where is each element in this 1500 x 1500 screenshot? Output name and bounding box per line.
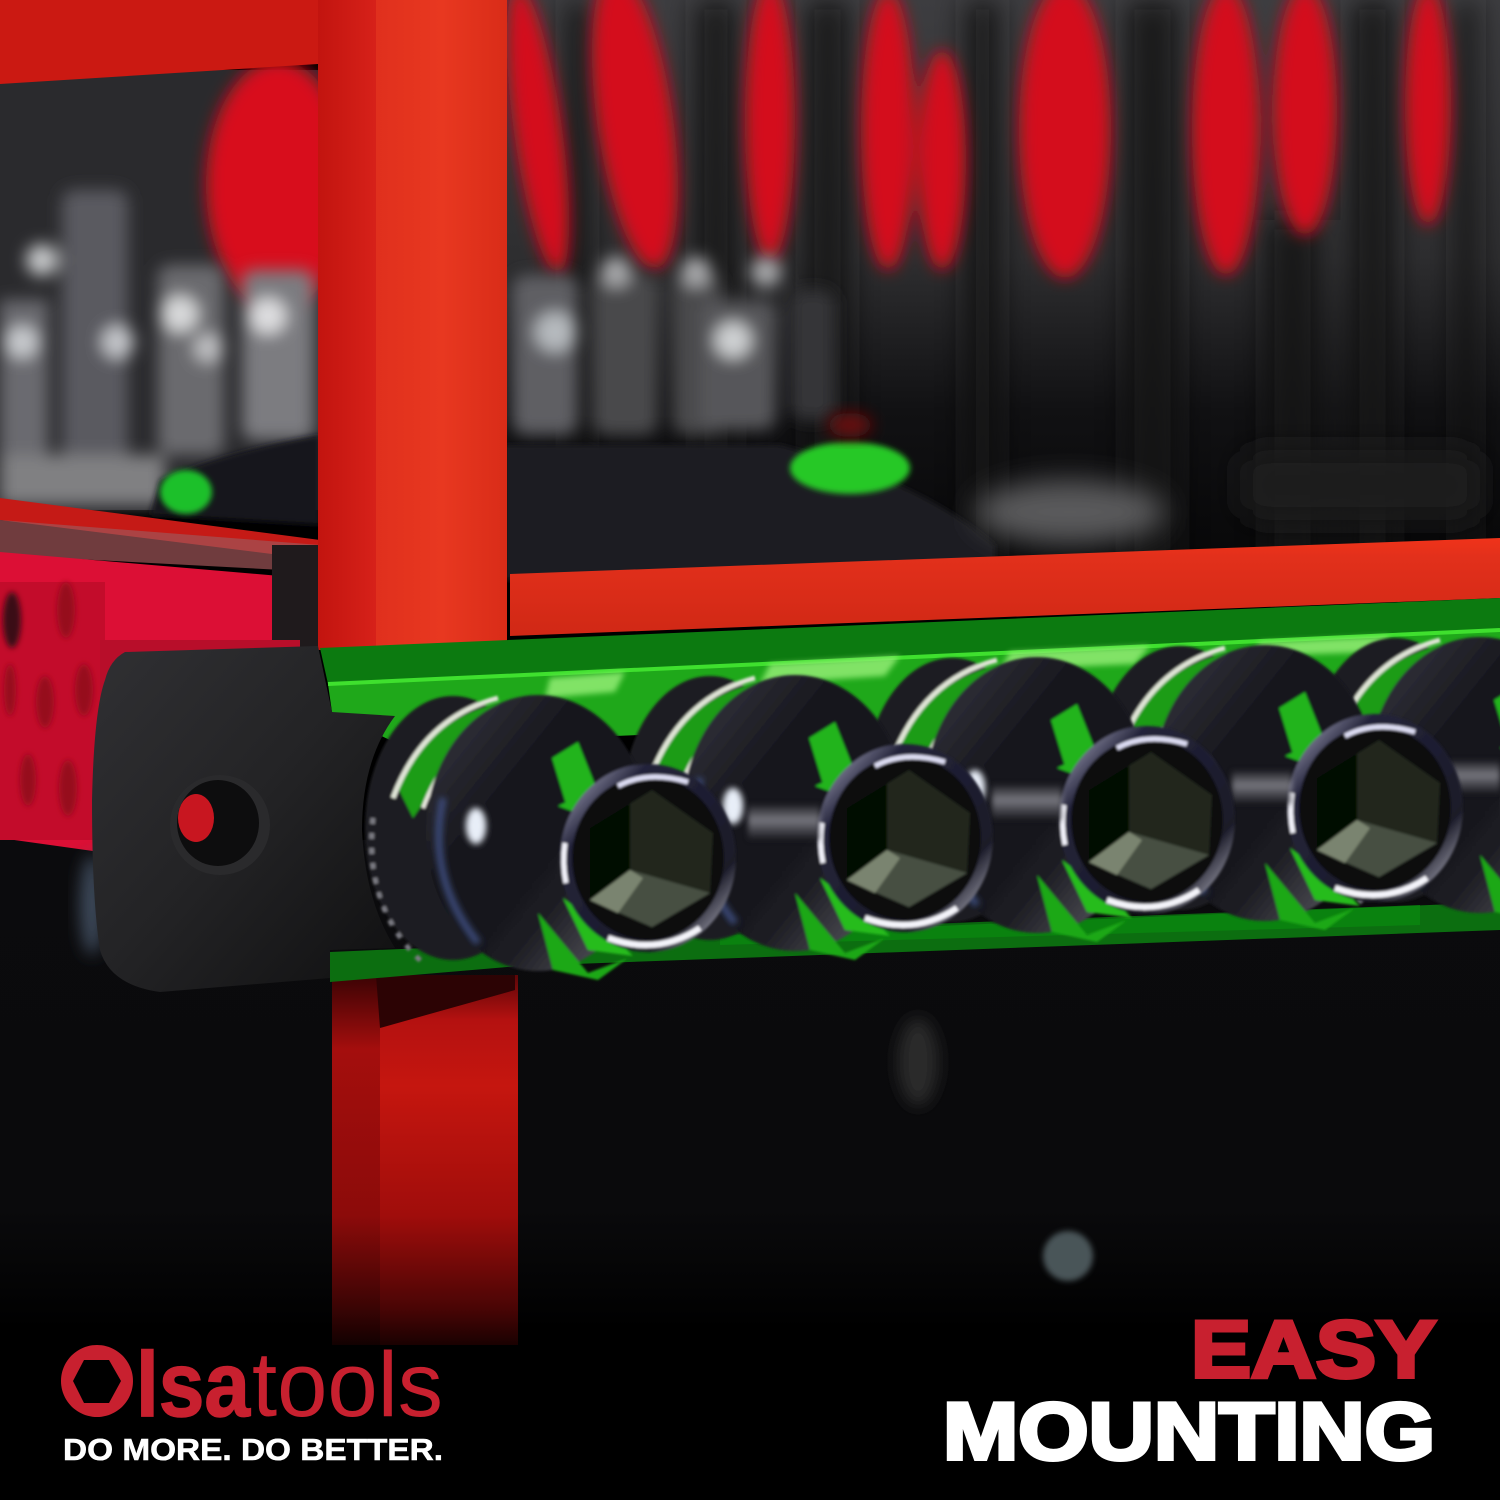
heading line 1: EASY (1191, 1305, 1436, 1395)
dark vertical shafts (565, 0, 1477, 600)
rail reflections (545, 636, 1390, 698)
dark ratchet (505, 445, 995, 580)
logo: tools (252, 1334, 443, 1436)
red vertical post lower (332, 975, 518, 1345)
green ratchet button (790, 442, 910, 494)
socket 2 (622, 675, 993, 960)
blurred tool wall (494, 0, 1500, 600)
socket 1 (365, 695, 736, 980)
tagline: DO MORE. DO BETTER. (63, 1432, 443, 1467)
rail dark top band (320, 598, 1500, 684)
socket 3 (864, 657, 1235, 942)
green rail lower (330, 902, 1500, 982)
left window behind frame (0, 60, 350, 525)
pegboard holes (3, 582, 93, 816)
red vertical post upper (318, 0, 507, 650)
socket 4 (1092, 645, 1463, 930)
black end cap with mounting hole (92, 646, 395, 992)
blurred sockets row (512, 257, 835, 435)
rail bright lower band (328, 630, 1500, 745)
dark items far right (1240, 450, 1480, 520)
blurred bokeh lights (898, 1018, 1093, 1281)
top horizontal frame bar (0, 0, 372, 84)
logo hexagon O (61, 1345, 133, 1417)
heading line 2: MOUNTING (943, 1387, 1435, 1477)
red horizontal bar (510, 538, 1500, 636)
red screwdriver handles (494, 0, 1451, 278)
socket 5 (1307, 637, 1500, 922)
mounting hole (170, 775, 270, 875)
lower-left red shelf with pegboard (0, 498, 320, 955)
heading (943, 1305, 1436, 1477)
logo wordmark: lsa (136, 1334, 251, 1436)
green rail top (320, 598, 1500, 745)
logo (61, 1334, 443, 1467)
